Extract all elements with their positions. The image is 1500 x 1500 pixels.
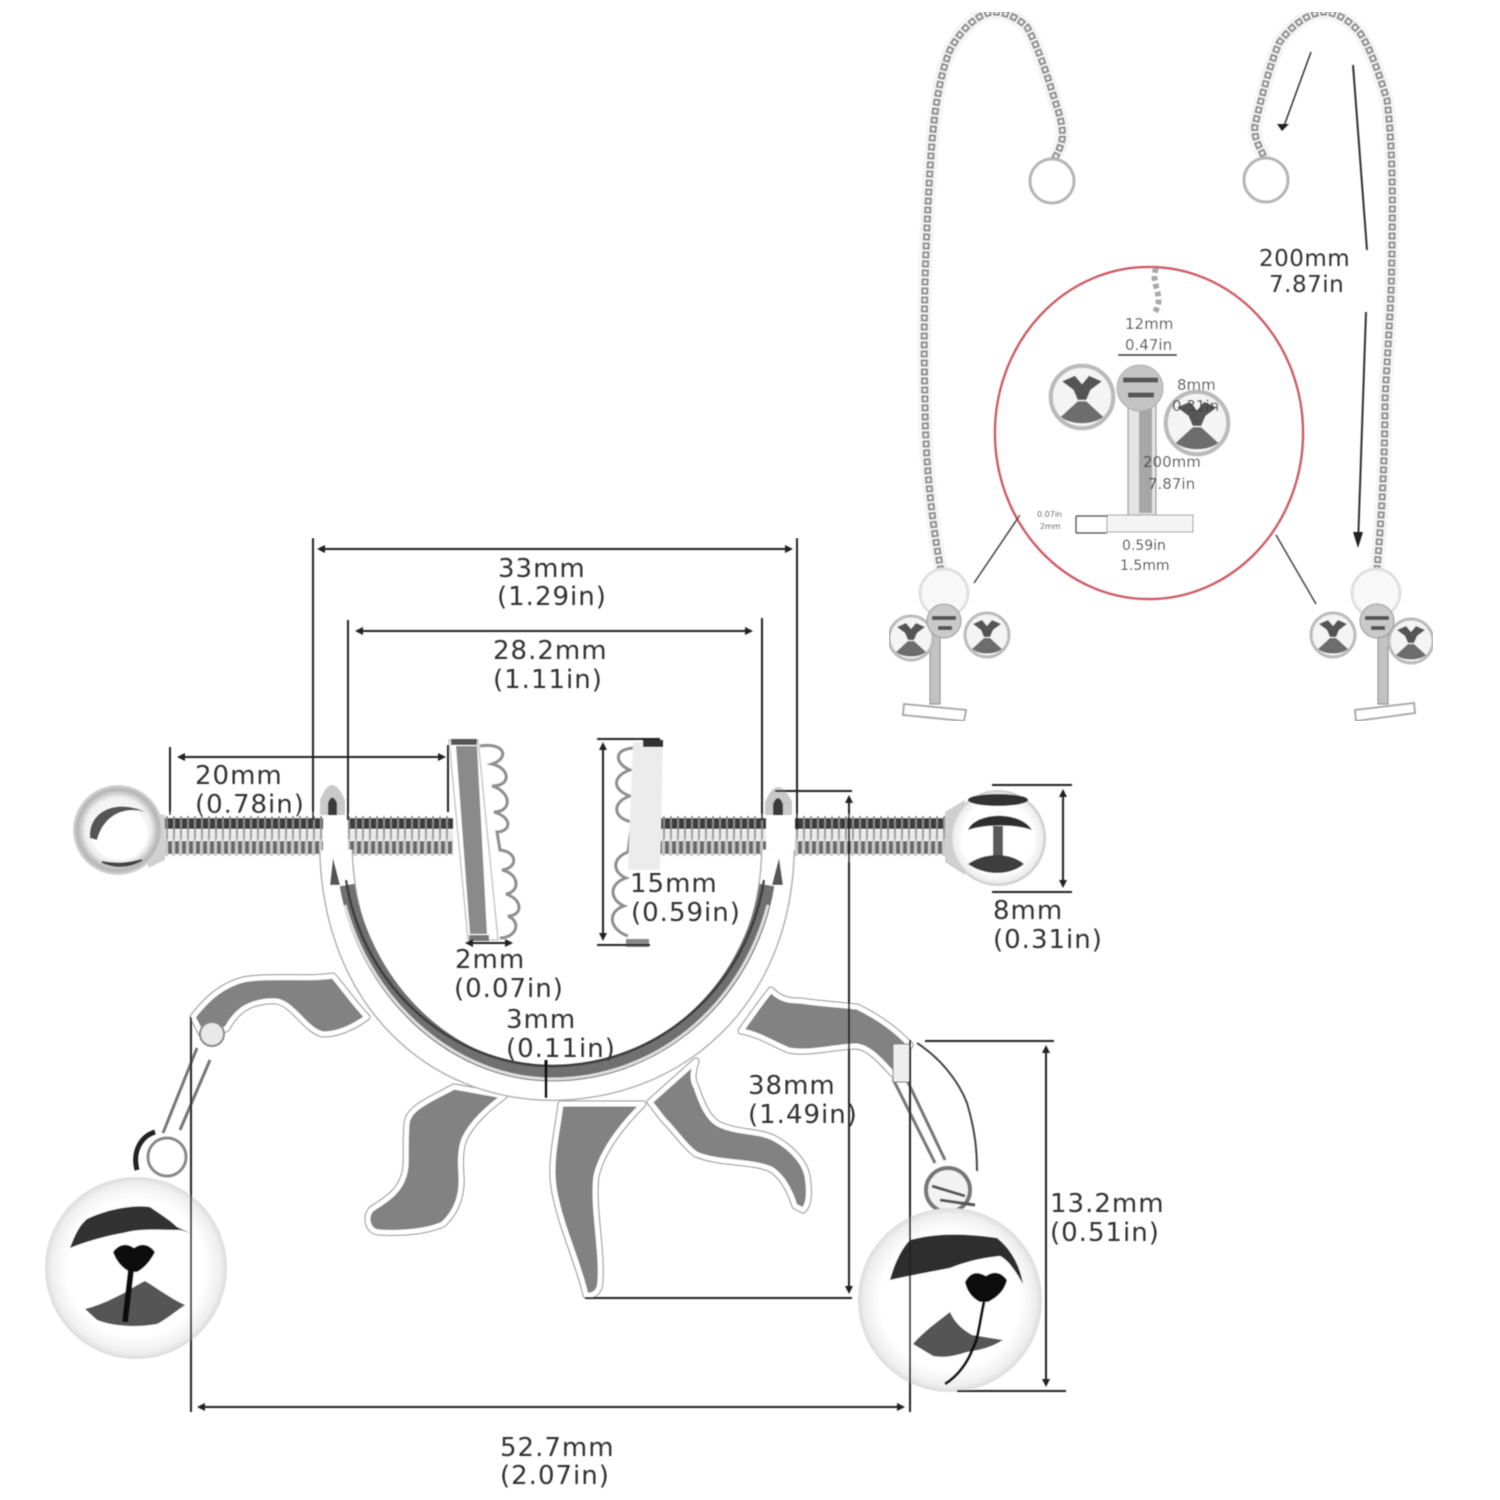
dimension: 33mm: (1.29in): [497, 582, 607, 612]
callout: red circle detail: 0.07in: [1037, 510, 1062, 519]
dimension: 33mm: 33mm: [498, 554, 586, 584]
callout: red circle detail: 0.31in: [1172, 397, 1219, 415]
arrow: chain length: [1277, 52, 1367, 548]
dimension: 20mm: (0.78in): [195, 790, 305, 820]
left chain: [924, 12, 1074, 590]
left small clamp: [889, 569, 1009, 721]
dimension: 15mm: [597, 739, 741, 945]
right serrated jaw: [612, 740, 663, 947]
U-shaped yoke: [320, 785, 792, 1098]
dimension: 2mm: [454, 943, 564, 1004]
dimension: 28.2mm: [348, 618, 762, 820]
panel: chain accessory: [889, 12, 1433, 721]
callout: red circle detail: 2mm: [1040, 522, 1061, 531]
callout: red circle detail: 0.59in: [1122, 538, 1166, 554]
label: 200mm: 7.87in: [1269, 272, 1344, 298]
dimension: 28.2mm: (1.11in): [493, 665, 603, 695]
dimension: 38mm: (1.49in): [748, 1100, 858, 1130]
callout: red circle detail: 1.5mm: [1120, 558, 1170, 574]
right bell: [858, 1043, 1042, 1392]
callout: red circle detail: 200mm: [1143, 453, 1201, 471]
label: 200mm: 200mm: [1259, 246, 1350, 272]
callout: red circle detail: [974, 267, 1316, 604]
dimension: 3mm: (0.11in): [506, 1034, 616, 1064]
dimension: 13.2mm: 13.2mm: [1050, 1189, 1165, 1219]
dimension: 3mm: [506, 1005, 616, 1064]
dimension: 8mm: [992, 785, 1103, 955]
callout: red circle detail: 0.47in: [1125, 336, 1172, 354]
right small clamp: [1311, 569, 1433, 721]
dimension: 2mm: (0.07in): [454, 974, 564, 1004]
callout: red circle detail: 7.87in: [1148, 475, 1195, 493]
dimension: 15mm: 15mm: [630, 869, 718, 899]
eye ring end: [73, 785, 165, 875]
dimension: 2mm: 2mm: [455, 945, 525, 975]
dimension: 52.7mm: 52.7mm: [500, 1433, 615, 1463]
dimension: 20mm: [170, 745, 448, 820]
dimension: 52.7mm: [191, 1017, 910, 1491]
right chain: [1244, 12, 1392, 590]
threaded bar: [158, 812, 953, 862]
dimension: 3mm: 3mm: [506, 1005, 576, 1035]
dimension: 8mm: 8mm: [993, 896, 1063, 926]
ball end: [945, 791, 1045, 885]
callout: red circle detail: 8mm: [1177, 376, 1216, 394]
dimension: 33mm: [313, 538, 797, 830]
flames: [193, 976, 910, 1295]
dimension: 20mm: 20mm: [195, 761, 283, 791]
panel: main clamp with dimensions: [45, 538, 1165, 1491]
dimension: 8mm: (0.31in): [993, 925, 1103, 955]
dimension: 13.2mm: [925, 1041, 1165, 1391]
left bell: [45, 1022, 227, 1359]
left serrated jaw: [449, 739, 519, 941]
dimension: 38mm: [585, 791, 858, 1298]
dimension: 38mm: 38mm: [748, 1071, 836, 1101]
dimension: 15mm: (0.59in): [631, 898, 741, 928]
dimension: 52.7mm: (2.07in): [500, 1461, 610, 1491]
dimension: 28.2mm: 28.2mm: [493, 636, 608, 666]
dimension: 13.2mm: (0.51in): [1050, 1218, 1160, 1248]
callout: red circle detail: 12mm: [1125, 315, 1173, 333]
